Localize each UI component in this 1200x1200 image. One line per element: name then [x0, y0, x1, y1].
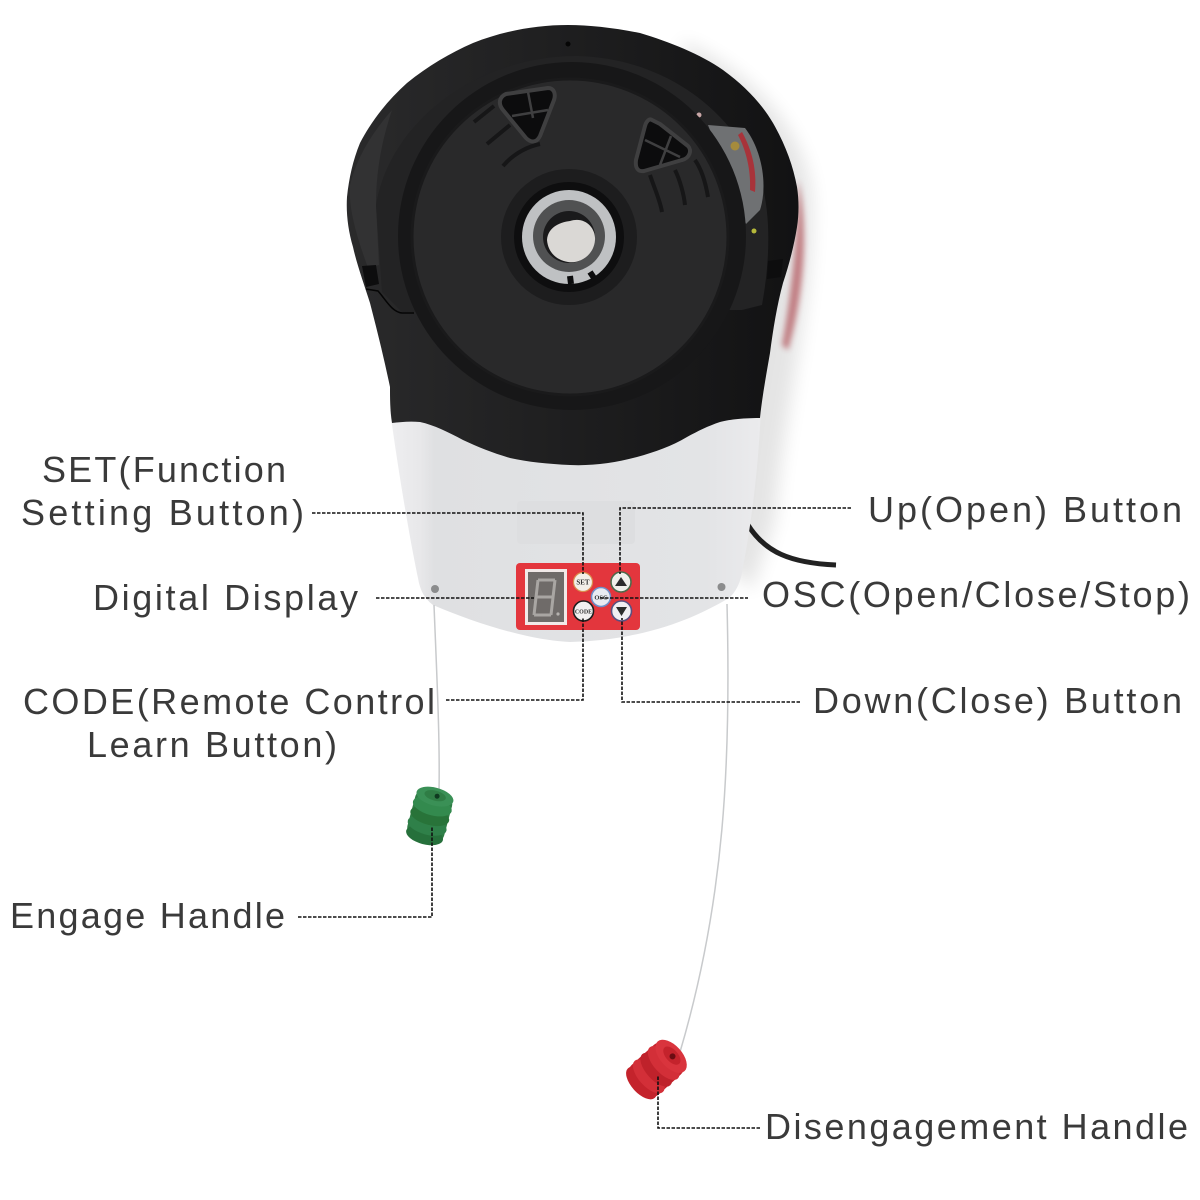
- callout: OSC line: [600, 597, 748, 599]
- label: SET: Setting Button): [21, 492, 304, 533]
- left seam: [366, 289, 414, 313]
- black upper housing: [347, 25, 798, 465]
- down button: [612, 601, 632, 621]
- callout: Engage line: [298, 826, 432, 917]
- hub: [501, 169, 637, 305]
- white lower housing: [390, 410, 761, 642]
- callout: Digital Display line: [376, 597, 534, 599]
- label: Disengagement Handle: Disengagement Handle: [765, 1106, 1188, 1147]
- main disc: [412, 79, 728, 395]
- SET button: SET: [576, 578, 590, 586]
- callout: Up line: [620, 508, 851, 574]
- label: CODE: Learn Button): [87, 724, 337, 765]
- callout: Down line: [622, 618, 800, 702]
- inner cover band: [376, 56, 768, 312]
- label: Digital Display: Digital Display: [93, 577, 358, 618]
- faint label recess: [517, 501, 635, 544]
- main disc outer: [398, 62, 746, 410]
- label: Down: Down(Close) Button: [813, 680, 1182, 721]
- mounting screws: [431, 583, 726, 593]
- retaining clip: [570, 272, 594, 284]
- label: SET: SET(Function: [42, 449, 286, 490]
- OSC button: OSC: [594, 594, 608, 602]
- gear bolt: [730, 142, 740, 150]
- red glow on wall: [782, 180, 804, 350]
- power cable: [748, 525, 836, 565]
- left side clip: [362, 265, 379, 287]
- green engage handle: [403, 783, 457, 849]
- motor unit: [347, 25, 836, 642]
- gear red strip: [738, 132, 755, 192]
- callout: Disengagement line: [658, 1075, 760, 1128]
- up button: [611, 572, 631, 592]
- right side clip: [767, 259, 783, 279]
- callout: CODE line: [446, 618, 583, 700]
- pull strings: [434, 604, 728, 1052]
- CODE button: CODE: [575, 610, 592, 616]
- mechanism window: [696, 112, 764, 234]
- label: Up: Up(Open) Button: [868, 489, 1182, 530]
- left vent: [474, 88, 555, 166]
- label: Engage Handle: Engage Handle: [10, 895, 285, 936]
- label: OSC: OSC(Open/Close/Stop): [762, 574, 1190, 615]
- callout: SET line: [312, 513, 583, 574]
- wall shadow: [680, 40, 812, 590]
- label: CODE: CODE(Remote Control: [23, 681, 435, 722]
- right vent: [636, 119, 708, 212]
- top screw hole: [566, 42, 570, 46]
- digital display: [525, 569, 567, 625]
- red panel: [516, 563, 640, 630]
- sheen on left shoulder: [350, 110, 392, 268]
- red disengagement handle: [620, 1033, 693, 1105]
- control panel: [516, 501, 640, 630]
